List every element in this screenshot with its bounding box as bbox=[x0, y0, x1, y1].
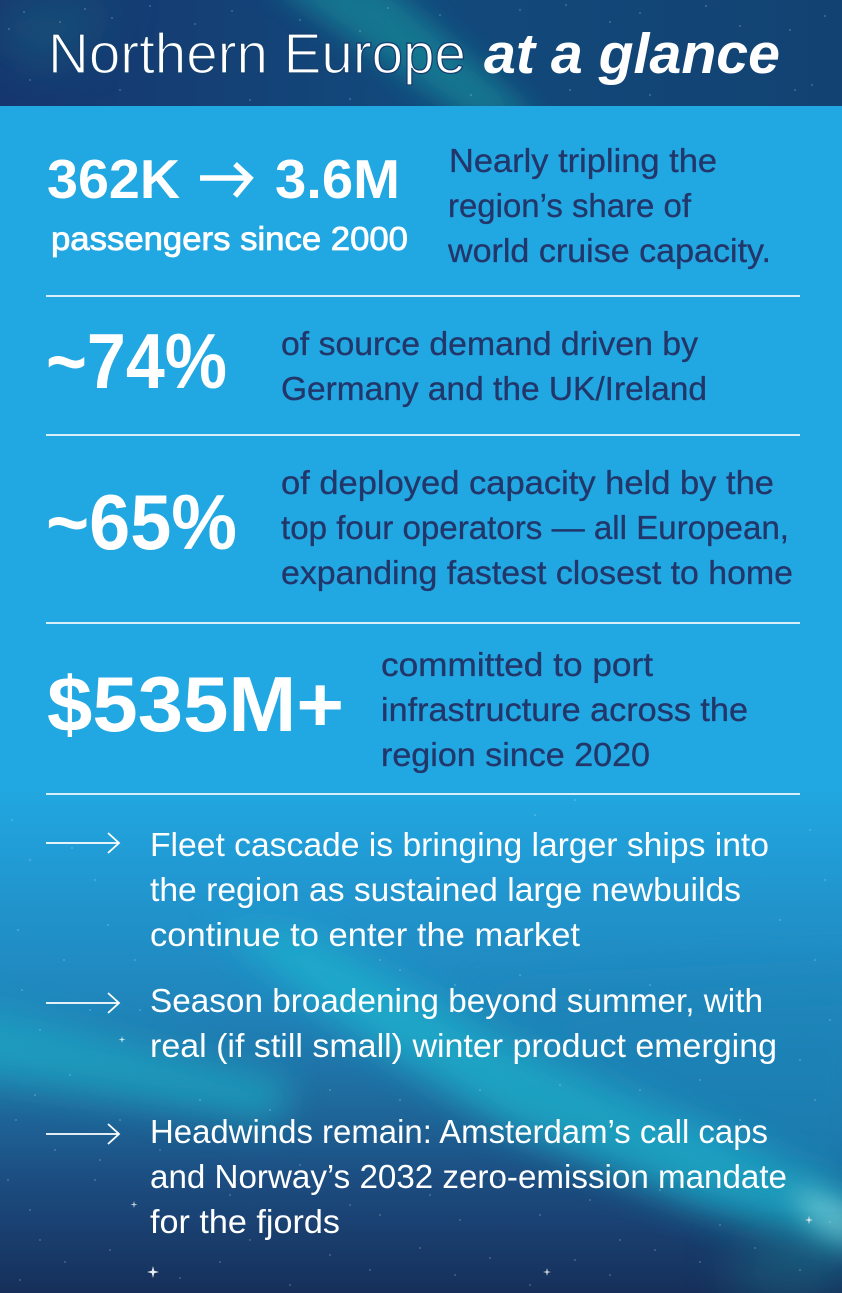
title: Northern Europe bbox=[48, 22, 466, 86]
text: headwinds bbox=[150, 1113, 787, 1240]
text: port infrastructure: committed to port bbox=[381, 646, 653, 683]
text: headwinds: Headwinds remain: Amsterdam’s call caps bbox=[150, 1113, 768, 1150]
title: at a glance bbox=[484, 22, 780, 86]
stat: passengers bbox=[47, 148, 408, 257]
icon: growth arrow bbox=[200, 164, 250, 196]
text: deployed capacity: top four operators — all European, bbox=[281, 509, 789, 546]
text: port infrastructure bbox=[381, 646, 748, 773]
background: header night sky bbox=[0, 0, 842, 106]
text: source demand bbox=[281, 325, 707, 407]
text: world cruise capacity share: region’s share of bbox=[448, 187, 692, 224]
text: headwinds: and Norway’s 2032 zero-emission mandate bbox=[150, 1158, 787, 1195]
stat: 74 percent: ~74% bbox=[46, 317, 227, 405]
text: world cruise capacity share: world cruise capacity. bbox=[447, 232, 771, 269]
icon: arrow 3 bbox=[46, 1124, 119, 1144]
background: flat blue panel bbox=[0, 106, 842, 796]
text: deployed capacity: expanding fastest closest to home bbox=[281, 554, 793, 591]
text: deployed capacity bbox=[281, 464, 793, 591]
stat: passengers: passengers since 2000 bbox=[51, 220, 408, 257]
text: world cruise capacity share bbox=[447, 142, 771, 269]
background: lower aurora sky with stars bbox=[0, 790, 842, 1293]
text: season broadening: Season broadening beyond summer, with bbox=[150, 982, 763, 1019]
text: season broadening bbox=[150, 982, 777, 1064]
text: headwinds: for the fjords bbox=[150, 1203, 340, 1240]
text: port infrastructure: infrastructure across the bbox=[381, 691, 748, 728]
icon: arrow 1 bbox=[46, 833, 119, 853]
stat: passengers: 3.6M bbox=[275, 148, 400, 210]
text: fleet cascade: Fleet cascade is bringing larger ships into bbox=[150, 826, 769, 863]
text: source demand: of source demand driven by bbox=[281, 325, 699, 362]
text: source demand: Germany and the UK/Ireland bbox=[281, 370, 707, 407]
text: fleet cascade: continue to enter the market bbox=[150, 916, 580, 953]
stat: 65 percent: ~65% bbox=[46, 478, 237, 566]
text: season broadening: real (if still small) winter product emerging bbox=[150, 1027, 777, 1064]
text: deployed capacity: of deployed capacity held by the bbox=[281, 464, 774, 501]
text: fleet cascade bbox=[150, 826, 769, 953]
stat: port investment: $535M+ bbox=[47, 660, 344, 748]
text: fleet cascade: the region as sustained large newbuilds bbox=[150, 871, 741, 908]
text: world cruise capacity share: Nearly tripling the bbox=[449, 142, 717, 179]
stat: passengers: 362K bbox=[47, 148, 180, 210]
icon: arrow 2 bbox=[46, 993, 119, 1013]
text: port infrastructure: region since 2020 bbox=[381, 736, 650, 773]
title bbox=[48, 22, 780, 86]
